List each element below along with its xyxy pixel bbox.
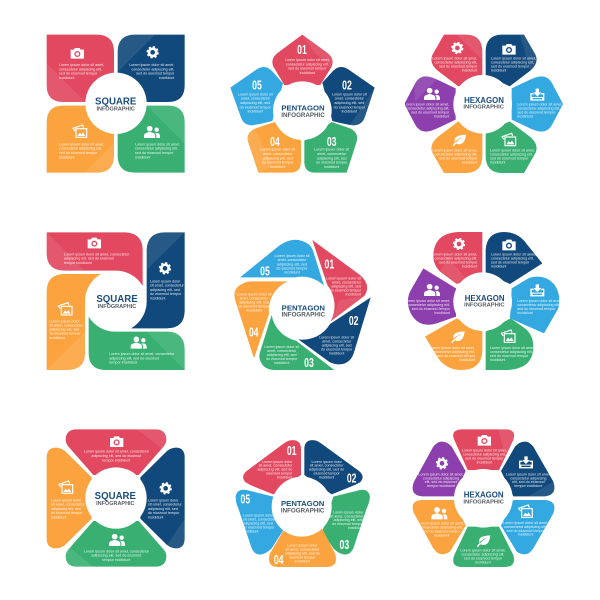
segment 03 green: adipiscing elit, sed [333, 518, 363, 522]
blade 05 light blue: amet, consectetur [277, 258, 307, 262]
segment: green leaf: incididunt [475, 560, 491, 564]
drop: dark blue camera: Lorem ipsum dolor sit amet, [491, 253, 536, 257]
drop: red gear: sed do eiusmod tempor [439, 261, 478, 265]
tile: purple people: sed do eiusmod tempor [411, 111, 450, 115]
centre circle and title: HEXAGON [464, 96, 504, 105]
blade 03 green: Lorem ipsum dolor sit [264, 345, 299, 349]
drop: light blue tray: incididunt [517, 311, 533, 315]
segment: red camera: consectetur adipiscing elit, [463, 453, 506, 457]
blade 03 green: adipiscing elit, sed [267, 353, 297, 357]
petal: red camera: tempor incididunt [102, 458, 130, 462]
segment 02 dark blue: adipiscing elit, sed [334, 101, 364, 105]
blade 05 light blue: Lorem ipsum dolor sit [275, 254, 309, 258]
segment: purple gear [413, 442, 466, 496]
drop: orange leaf: incididunt [460, 358, 475, 362]
segment 05 light blue: 05 [240, 492, 250, 506]
tile: purple people: incididunt [434, 115, 449, 119]
blade: orange photos: incididunt [49, 336, 65, 340]
blade 05 light blue [240, 240, 324, 286]
centre circle and title: INFOGRAPHIC [464, 303, 505, 309]
centre circle and title: INFOGRAPHIC [96, 501, 135, 507]
segment 04 orange: amet, consectetur [263, 152, 293, 156]
drop: orange leaf: consectetur adipiscing elit, [432, 350, 475, 354]
centre circle and title [272, 477, 332, 537]
petal: red camera: adipiscing elit, sed do eiusmod [91, 454, 141, 458]
tile: red gear: consectetur adipiscing elit, [434, 60, 477, 64]
blade 04 orange: incididunt [246, 309, 262, 313]
segment 03 green: Lorem ipsum dolor [333, 510, 364, 514]
drop: light blue tray: Lorem ipsum dolor sit amet, [517, 299, 562, 303]
drop: purple people: incididunt [435, 311, 450, 315]
petal: orange photos [47, 448, 92, 548]
petal: orange photos: sit amet, consectetur [51, 503, 86, 507]
drop: orange leaf: Lorem ipsum dolor sit amet, [430, 346, 475, 350]
segment 02 dark blue: 02 [342, 79, 352, 93]
blade 02 dark blue: Lorem ipsum dolor sit [319, 335, 354, 339]
drop: green photos: consectetur adipiscing elit, [490, 350, 533, 354]
segment: purple gear: consectetur adipiscing [423, 476, 459, 480]
drop: red gear: incididunt [462, 265, 477, 269]
blade: dark blue gear: do eiusmod tempor [150, 292, 182, 296]
centre circle and title [454, 469, 513, 528]
segment: purple gear: Lorem ipsum dolor sit amet, [418, 472, 464, 476]
segment 05 light blue: adipiscing elit, sed [243, 521, 273, 525]
blade 01 red: incididunt [346, 293, 361, 297]
blade 01 red [312, 240, 367, 321]
centre circle and title: PENTAGON [281, 104, 325, 113]
tile: orange leaf [431, 121, 482, 173]
blade 03 green: amet, consectetur [267, 349, 297, 353]
segment 01 red: adipiscing elit, sed do [257, 468, 292, 472]
drop: orange leaf [425, 318, 482, 370]
segment: light blue photos [501, 500, 554, 554]
centre circle and title: INFOGRAPHIC [463, 499, 505, 505]
petal: green people [66, 521, 166, 567]
segment 04 orange [269, 529, 336, 567]
blade: orange photos: Lorem ipsum dolor [49, 319, 80, 323]
blade: dark blue gear: sit amet, consectetur [150, 284, 185, 288]
blade 01 red: amet, consectetur [332, 281, 362, 285]
blade 03 green: 03 [304, 356, 314, 370]
tile: green people: incididunt [135, 155, 150, 159]
petal: green people: adipiscing elit, sed do eiusmod [91, 554, 141, 558]
centre circle and title: PENTAGON [281, 499, 325, 508]
blade 04 orange: do eiusmod tempor [238, 305, 270, 309]
centre circle and title [85, 467, 147, 529]
segment 02 dark blue: do eiusmod tempor [334, 105, 366, 109]
tile: dark blue gear: sed do eiusmod tempor [136, 72, 175, 76]
petal: green people: Lorem ipsum dolor sit amet, consectetur [84, 549, 150, 553]
segment 01 red [243, 440, 301, 494]
segment 04 orange: 04 [274, 553, 283, 567]
tile: orange photos: sed do eiusmod tempor [59, 151, 98, 155]
tile: dark blue camera: Lorem ipsum dolor sit amet, [491, 56, 536, 60]
segment: purple gear: elit, sed do eiusmod [425, 480, 457, 484]
tile: orange photos [47, 106, 114, 173]
segment: orange people [413, 500, 466, 554]
segment 02 dark blue: amet, consectetur [335, 97, 365, 101]
segment 05 light blue: 05 [252, 79, 262, 93]
tile: orange photos: Lorem ipsum dolor sit amet, [59, 142, 104, 146]
segment 01 red: Lorem ipsum dolor [262, 460, 293, 464]
title: PENTAGON [282, 304, 325, 313]
blade: dark blue gear: adipiscing elit, sed [150, 288, 180, 292]
drop: purple people [405, 268, 456, 325]
tile: dark blue gear: incididunt [159, 76, 174, 80]
tile: dark blue gear: consectetur adipiscing elit, [131, 67, 174, 71]
segment 01 red: sed do eiusmod tempor [288, 67, 327, 71]
centre circle and title: INFOGRAPHIC [96, 107, 135, 113]
blade 04 orange: adipiscing elit, sed [239, 301, 269, 305]
segment 04 orange: incididunt [295, 559, 310, 563]
segment 03 green: incididunt [348, 526, 363, 530]
segment 03 green: do eiusmod tempor [316, 161, 348, 165]
tile: light blue tray: sed do eiusmod tempor [517, 111, 556, 115]
segment 02 dark blue: sit amet, consectetur [310, 464, 344, 468]
tile: light blue tray [512, 76, 563, 132]
blade: red camera: tempor incididunt [64, 261, 92, 265]
segment 04 orange [248, 122, 301, 173]
segment: dark blue tray [501, 442, 554, 496]
tile: red camera: incididunt [59, 76, 74, 80]
segment 05 light blue: do eiusmod tempor [243, 525, 275, 529]
tile: red gear: Lorem ipsum dolor sit amet, [432, 56, 477, 60]
petal: dark blue gear: sit amet, consectetur [148, 503, 183, 507]
title: INFOGRAPHIC [282, 312, 326, 319]
segment: red camera [453, 429, 514, 470]
tile: green photos [486, 121, 537, 173]
segment 01 red: sit amet, consectetur [259, 464, 293, 468]
blade 03 green [259, 315, 334, 370]
segment 03 green [304, 122, 357, 173]
tile: dark blue camera: sed do eiusmod tempor [491, 65, 530, 69]
segment: dark blue tray: Lorem ipsum dolor sit amet, [506, 472, 551, 476]
centre circle and title: INFOGRAPHIC [281, 507, 325, 514]
panel: pentagon infographic, numbered [230, 35, 375, 173]
petal: orange photos: do eiusmod tempor [51, 511, 83, 515]
petal: dark blue gear: do eiusmod tempor [148, 511, 180, 515]
segment: light blue photos: Lorem ipsum dolor sit amet, [503, 521, 548, 525]
blade: orange photos: do eiusmod tempor [49, 332, 81, 336]
blade 02 dark blue: incididunt [329, 351, 344, 355]
segment 04 orange: adipiscing elit, sed [263, 156, 293, 160]
centre circle and title: HEXAGON [465, 294, 505, 303]
petal: orange photos: Lorem ipsum dolor [51, 499, 82, 503]
drop: green photos: incididunt [490, 358, 505, 362]
segment 05 light blue: adipiscing elit, sed [240, 101, 270, 105]
segment 01 red: incididunt [300, 71, 315, 75]
centre circle and title [453, 75, 512, 134]
blade 03 green: incididunt [274, 361, 289, 365]
segment 04 orange: Lorem ipsum dolor sit [260, 148, 295, 152]
segment 02 dark blue [304, 440, 363, 494]
segment 02 dark blue [322, 67, 375, 125]
segment 02 dark blue: eiusmod tempor [314, 472, 341, 476]
blade 05 light blue: adipiscing elit, sed [277, 262, 307, 266]
tile: dark blue camera: consectetur adipiscing elit, [491, 60, 534, 64]
segment: orange people: incididunt [434, 534, 449, 538]
tile: green photos: consectetur adipiscing elit, [490, 152, 533, 156]
blade 02 dark blue: 02 [349, 314, 358, 328]
tile: orange photos: incididunt [59, 155, 74, 159]
segment 05 light blue [236, 490, 283, 555]
segment 05 light blue [230, 67, 283, 125]
blade: green people: Lorem ipsum dolor sit amet, consectetur [109, 352, 175, 356]
blade: orange photos: sit amet, consectetur [49, 323, 84, 327]
segment: dark blue tray: consectetur adipiscing [510, 476, 546, 480]
centre circle and title: SQUARE [95, 491, 137, 502]
drop: green photos [486, 318, 535, 370]
tile: red gear [431, 35, 482, 86]
segment 03 green: incididunt [324, 165, 339, 169]
title [282, 304, 326, 319]
drop: purple people: sed do eiusmod tempor [412, 307, 451, 311]
blade 01 red: 01 [324, 257, 334, 271]
centre circle and title [273, 81, 332, 140]
segment 04 orange: 04 [270, 135, 280, 149]
segment: red camera: Lorem ipsum dolor sit amet, [462, 449, 507, 453]
segment 03 green: 03 [327, 135, 336, 149]
segment 02 dark blue: adipiscing elit, sed do [309, 468, 344, 472]
centre circle and title [453, 272, 512, 331]
segment 01 red: Lorem ipsum dolor sit amet, [285, 58, 330, 62]
segment: purple gear: tempor incididunt [427, 484, 455, 488]
tile: red camera: consectetur adipiscing elit, [59, 67, 102, 71]
segment: orange people: sed do eiusmod tempor [423, 530, 462, 534]
blade: green people [89, 317, 185, 370]
tile: purple people: Lorem ipsum dolor sit amet, [404, 103, 449, 107]
segment: light blue photos: consectetur adipiscing elit, [504, 525, 547, 529]
segment 05 light blue: Lorem ipsum dolor [243, 513, 274, 517]
panel: square infographic, quarter tiles [47, 35, 185, 173]
segment 05 light blue: Lorem ipsum dolor sit [238, 92, 273, 96]
blade 03 green: do eiusmod tempor [266, 357, 298, 361]
blade: red camera: Lorem ipsum dolor sit amet, consectetur [64, 252, 130, 256]
centre circle and title: INFOGRAPHIC [463, 105, 505, 111]
panel: pentagon infographic, pinwheel [234, 240, 371, 370]
segment 05 light blue: incididunt [243, 529, 258, 533]
tile: purple people: consectetur adipiscing elit, [406, 107, 449, 111]
panel: square infographic, pinwheel [47, 232, 185, 370]
tile: dark blue gear [118, 35, 185, 102]
tile: green people: sed do eiusmod tempor [135, 151, 174, 155]
segment 02 dark blue: Lorem ipsum dolor sit [332, 92, 367, 96]
panel: square infographic, octagonal petals [47, 429, 185, 567]
segment: red camera: sed do eiusmod tempor [465, 457, 504, 461]
blade 02 dark blue: amet, consectetur [322, 339, 352, 343]
blade 01 red: Lorem ipsum dolor sit [326, 277, 361, 281]
blade: green people: adipiscing elit, sed do eiusmod [109, 356, 159, 360]
tile: green people [118, 106, 185, 173]
segment 04 orange: adipiscing elit, sed do [285, 551, 320, 555]
tile: dark blue gear: Lorem ipsum dolor sit amet, [129, 63, 174, 67]
drop: light blue tray: consectetur adipiscing elit, [517, 303, 560, 307]
blade: dark blue gear: incididunt [150, 296, 165, 300]
segment 02 dark blue: incididunt [319, 476, 334, 480]
tile: light blue tray: consectetur adipiscing elit, [517, 107, 560, 111]
title [96, 294, 138, 310]
tile: dark blue camera [486, 35, 537, 86]
panel: pentagon infographic, rounded segments [236, 440, 370, 567]
blade 04 orange: 04 [249, 325, 258, 339]
segment: dark blue tray: elit, sed do eiusmod [512, 480, 545, 484]
petal: orange photos: adipiscing elit, sed [51, 507, 81, 511]
petal: red camera [66, 429, 166, 475]
segment: green leaf: sed do eiusmod tempor [464, 557, 503, 561]
drop: green photos: Lorem ipsum dolor sit amet, [490, 346, 535, 350]
tile: dark blue camera: incididunt [491, 68, 506, 72]
drop: purple people: Lorem ipsum dolor sit amet, [405, 299, 450, 303]
panel: hexagon infographic, drops [405, 232, 562, 370]
drop: dark blue camera: consectetur adipiscing elit, [491, 257, 534, 261]
title: SQUARE [96, 294, 138, 305]
petal: dark blue gear: adipiscing elit, sed [148, 507, 178, 511]
petal: dark blue gear: Lorem ipsum dolor [148, 499, 179, 503]
blade 02 dark blue: do eiusmod tempor [321, 347, 353, 351]
segment 03 green: do eiusmod tempor [332, 522, 364, 526]
segment 01 red: eiusmod tempor [266, 472, 293, 476]
segment 05 light blue: sit amet, consectetur [243, 517, 278, 521]
petal: green people: tempor incididunt [102, 558, 130, 562]
blade: orange photos [47, 274, 101, 370]
segment: red camera: incididunt [477, 460, 492, 464]
drop: orange leaf: sed do eiusmod tempor [437, 354, 476, 358]
segment 05 light blue: do eiusmod tempor [240, 105, 272, 109]
blade 01 red: adipiscing elit, sed [331, 285, 361, 289]
drop: purple people: consectetur adipiscing elit, [407, 303, 450, 307]
tile: orange leaf: consectetur adipiscing elit, [434, 152, 477, 156]
segment 03 green [322, 490, 370, 555]
blade 04 orange [234, 281, 288, 358]
drop: dark blue camera: sed do eiusmod tempor [491, 261, 530, 265]
centre circle and title: SQUARE [95, 97, 137, 108]
segment: orange people: consectetur adipiscing elit, [420, 526, 463, 530]
segment: green leaf [453, 527, 514, 567]
segment 01 red: consectetur adipiscing elit, [286, 62, 329, 66]
blade: dark blue gear [131, 232, 185, 328]
segment 01 red: 01 [297, 43, 307, 57]
blade 04 orange: Lorem ipsum dolor sit [237, 293, 271, 297]
segment 03 green: 03 [339, 538, 349, 552]
blade 05 light blue: do eiusmod tempor [276, 266, 308, 270]
tile: light blue tray: incididunt [517, 115, 533, 119]
segment: orange people: Lorem ipsum dolor sit amet, [419, 522, 464, 526]
blade: red camera [47, 232, 143, 286]
segment 04 orange: sit amet, consectetur [285, 547, 320, 551]
segment 05 light blue: amet, consectetur [241, 97, 271, 101]
tile: orange leaf: Lorem ipsum dolor sit amet, [432, 148, 477, 152]
blade 04 orange: amet, consectetur [239, 297, 269, 301]
segment: green leaf: Lorem ipsum dolor sit amet, [460, 549, 506, 553]
blade: dark blue gear: Lorem ipsum dolor [150, 279, 181, 283]
drop: dark blue camera: incididunt [491, 265, 506, 269]
tile: red gear: sed do eiusmod tempor [439, 65, 478, 69]
tile: light blue tray: Lorem ipsum dolor sit amet, [517, 103, 562, 107]
petal: dark blue gear: incididunt [148, 515, 163, 519]
segment 04 orange: eiusmod tempor [289, 555, 316, 559]
segment 03 green: adipiscing elit, sed [317, 156, 347, 160]
segment 01 red [272, 35, 333, 85]
blade 01 red: do eiusmod tempor [330, 289, 362, 293]
drop: red gear: Lorem ipsum dolor sit amet, [432, 253, 477, 257]
blade: orange photos: adipiscing elit, sed [49, 328, 79, 332]
segment 01 red: 01 [287, 444, 296, 458]
segment 02 dark blue: Lorem ipsum dolor [312, 460, 343, 464]
centre circle and title: HEXAGON [464, 491, 504, 500]
tile: red camera [47, 35, 114, 102]
blade 05 light blue: 05 [260, 264, 270, 278]
segment 02 dark blue: 02 [347, 472, 356, 486]
petal: dark blue gear [140, 448, 185, 548]
segment: dark blue tray: tempor incididunt [514, 484, 542, 488]
petal: orange photos: incididunt [51, 515, 66, 519]
drop: light blue tray: sed do eiusmod tempor [517, 307, 556, 311]
segment 03 green: Lorem ipsum dolor sit [314, 148, 349, 152]
panel: hexagon infographic, triangular segments [413, 429, 554, 567]
segment 05 light blue: incididunt [248, 110, 263, 114]
blade 02 dark blue [298, 297, 371, 364]
tile: red camera: Lorem ipsum dolor sit amet, [59, 63, 104, 67]
segment 01 red: incididunt [277, 476, 292, 480]
drop: green photos: sed do eiusmod tempor [490, 354, 529, 358]
title: INFOGRAPHIC [98, 304, 136, 310]
tile: purple people [404, 76, 456, 132]
segment 04 orange: incididunt [270, 165, 285, 169]
blade 02 dark blue: adipiscing elit, sed [322, 343, 352, 347]
tile: green people: consectetur adipiscing elit, [135, 147, 178, 151]
segment: light blue photos: sed do eiusmod tempor [507, 529, 546, 533]
tile: green photos: incididunt [490, 160, 505, 164]
segment 02 dark blue: incididunt [342, 110, 357, 114]
tile: orange leaf: sed do eiusmod tempor [439, 156, 478, 160]
segment 04 orange: do eiusmod tempor [262, 161, 294, 165]
panel: hexagon infographic, pointed tiles [404, 35, 563, 173]
segment 03 green: amet, consectetur [317, 152, 347, 156]
centre circle and title: INFOGRAPHIC [281, 112, 325, 119]
blade: red camera: adipiscing elit, sed do eiusmod [64, 257, 114, 261]
tile: orange photos: consectetur adipiscing elit, [59, 147, 102, 151]
segment 04 orange: Lorem ipsum dolor [287, 543, 318, 547]
blade 05 light blue: incididunt [284, 270, 300, 274]
blade: green people: tempor incididunt [109, 361, 137, 365]
drop: dark blue camera [486, 232, 542, 284]
drop: red gear [432, 232, 482, 284]
segment 03 green: sit amet, consectetur [330, 514, 364, 518]
drop: red gear: consectetur adipiscing elit, [434, 257, 477, 261]
centre circle and title [85, 73, 147, 134]
tile: green people: Lorem ipsum dolor sit amet, [135, 142, 180, 146]
tile: red gear: incididunt [462, 68, 477, 72]
tile: green photos: Lorem ipsum dolor sit amet, [490, 148, 535, 152]
tile: orange leaf: incididunt [462, 160, 477, 164]
tile: green photos: sed do eiusmod tempor [490, 156, 529, 160]
segment: light blue photos: incididunt [518, 533, 533, 537]
drop: light blue tray [510, 277, 562, 333]
petal: red camera: Lorem ipsum dolor sit amet, consectetur [84, 450, 150, 454]
segment: green leaf: consectetur adipiscing elit, [462, 553, 504, 557]
tile: red camera: sed do eiusmod tempor [59, 72, 98, 76]
